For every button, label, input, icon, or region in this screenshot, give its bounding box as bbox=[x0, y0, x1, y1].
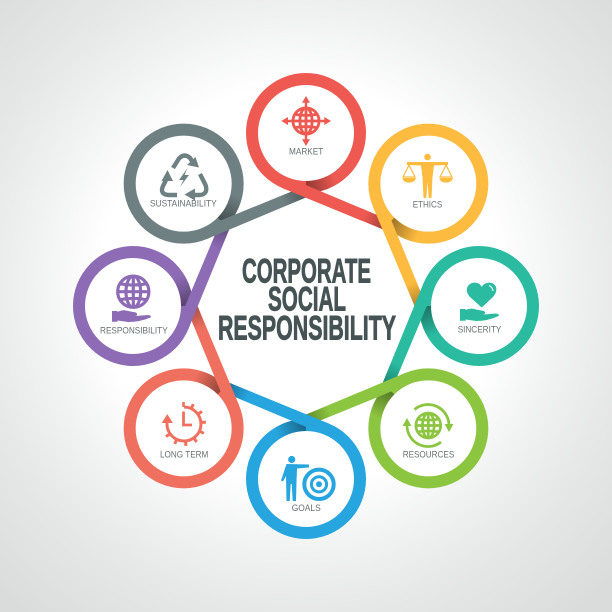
market loop bbox=[252, 79, 366, 221]
panel: resources bbox=[303, 322, 505, 524]
label: ethics: ETHICS bbox=[413, 200, 442, 210]
icon: globe with four arrows bbox=[281, 96, 331, 146]
goals loop bbox=[225, 383, 360, 533]
market ribbon end bbox=[357, 208, 387, 229]
panel: ethics bbox=[322, 107, 524, 309]
icon: person and target bbox=[281, 456, 334, 501]
panel: goals bbox=[225, 383, 360, 533]
label: long term: LONG TERM bbox=[160, 450, 208, 460]
label: market: MARKET bbox=[289, 147, 324, 157]
ethics loop bbox=[322, 107, 524, 309]
icon: clock with gear and arrow bbox=[162, 402, 206, 446]
label: resources: RESOURCES bbox=[403, 450, 454, 460]
title: RESPONSIBILITY bbox=[218, 310, 396, 348]
title: SOCIAL bbox=[268, 280, 346, 318]
label: responsibility: RESPONSIBILITY bbox=[100, 326, 168, 336]
panel: sincerity bbox=[383, 252, 533, 387]
icon: heart in hand bbox=[460, 283, 499, 321]
label: sincerity: SINCERITY bbox=[458, 324, 501, 334]
icon: recycling arrows with bolt bbox=[162, 156, 206, 200]
sincerity loop bbox=[383, 252, 533, 387]
label: sustainability: SUSTAINABILITY bbox=[150, 199, 217, 209]
icon: globe with cycle arrows bbox=[402, 405, 454, 447]
title: CORPORATE bbox=[242, 252, 371, 290]
sustainability loop bbox=[107, 88, 309, 290]
title bbox=[218, 252, 396, 348]
responsibility loop bbox=[79, 225, 229, 360]
panel: market bbox=[252, 79, 366, 221]
resources loop bbox=[303, 322, 505, 524]
long term loop bbox=[88, 303, 290, 505]
icon: figure with scales bbox=[402, 154, 453, 198]
icon: globe in hand bbox=[112, 276, 151, 322]
panel: long term bbox=[88, 303, 290, 505]
label: goals: GOALS bbox=[292, 503, 321, 513]
panel: sustainability bbox=[107, 88, 309, 290]
panel: responsibility bbox=[79, 225, 229, 360]
